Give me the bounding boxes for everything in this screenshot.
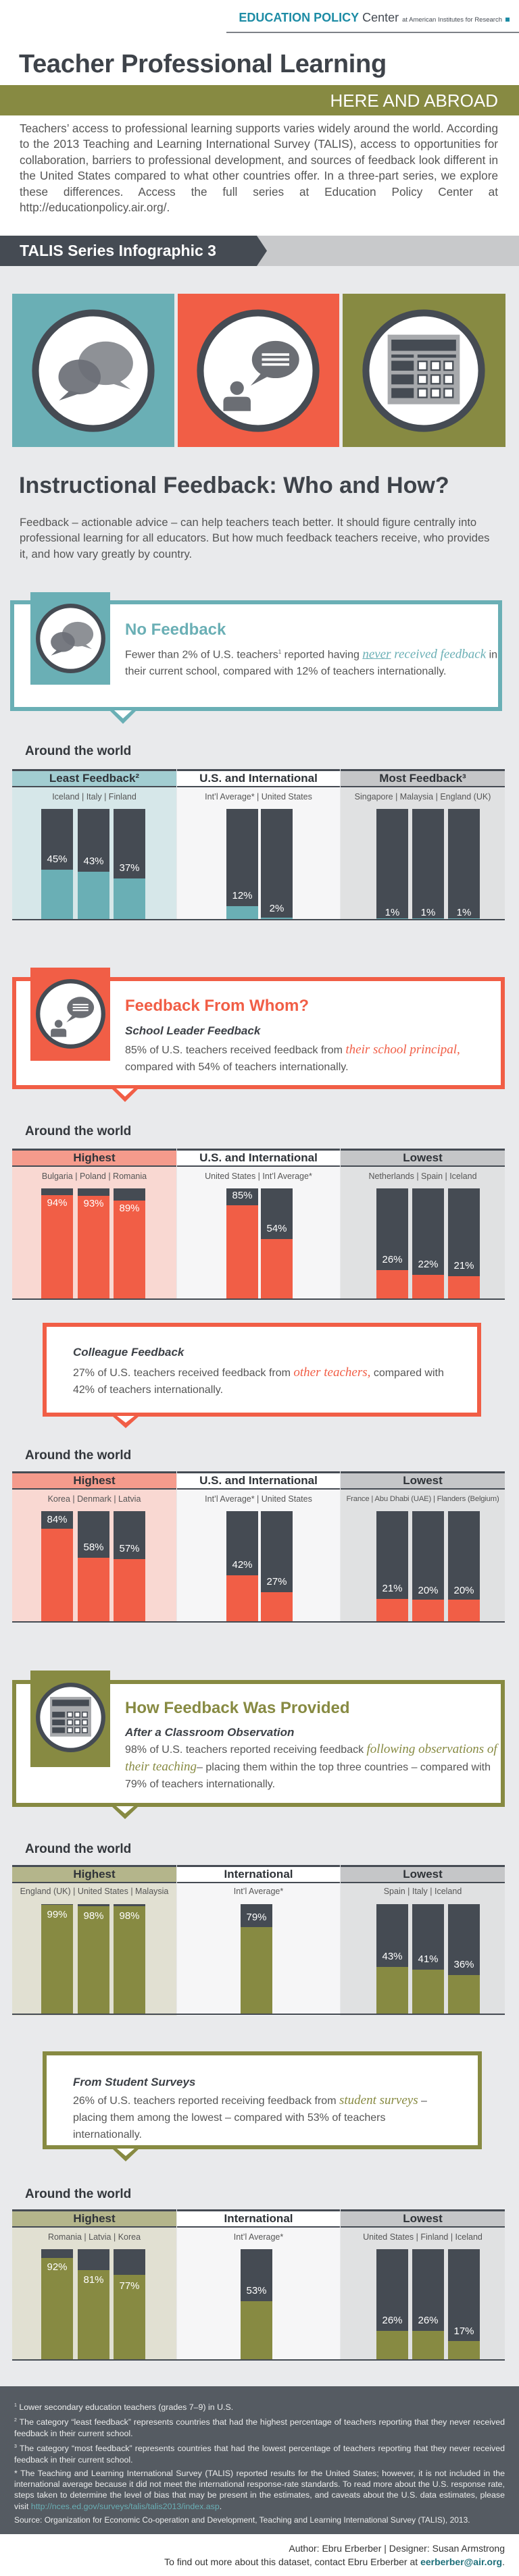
intro paragraph: Teachers’ access to professional learning supports varies widely around the world. According to the 2013 Teaching and Learning International Survey (TALIS), access to opportunities for collaboration, barriers to professional development, and sources of feedback look different in the United States compared to what other countries offer. In a three-part series, we explore these differences. Access the full series at Education Policy Center at http://educationpolicy.air.org/. [20,122,498,214]
icon: person speaking small [30,968,110,1061]
chart: no feedback: Most Feedback³ [379,772,466,785]
callout tip [112,1806,138,1819]
chart: school leader [12,1149,505,1300]
chart: classroom observation: 99% [47,1909,68,1920]
chart: no feedback: U.S. and International [199,772,318,785]
heading: around the world 4: Around the world [25,1842,131,1856]
chart: student surveys: 26% [418,2315,439,2326]
chart: school leader: Highest [73,1151,116,1164]
chart: no feedback: Least Feedback² [49,772,139,785]
chart: colleague: 84% [47,1514,68,1525]
chart: student surveys: 92% [47,2261,68,2273]
chart: no feedback: Int’l Average* | United States [205,792,312,801]
footnotes panel: 3 The category “most feedback” represents countries that had the lowest percentage of teachers reporting that they never received feedback in their current school. [14,2444,505,2465]
chart: school leader: 26% [382,1254,403,1265]
chart: student surveys: International [224,2212,293,2225]
credits: To find out more about this dataset, contact Ebru Erberber at eerberber@air.org. [164,2556,505,2567]
chart: colleague: Lowest [403,1474,443,1487]
callout: colleague feedback [43,1323,481,1417]
chart: classroom observation: Int’l Average* [234,1887,283,1896]
chart: classroom observation: 79% [246,1912,267,1923]
chart: school leader: 54% [266,1223,287,1234]
chart: classroom observation: 36% [453,1959,474,1970]
chart: colleague: Int’l Average* | United States [205,1494,312,1504]
heading: around the world 1: Around the world [25,744,131,758]
chart: colleague: Highest [73,1474,116,1487]
chart: colleague: France | Abu Dhabi (UAE) | Flanders (Belgium) [346,1495,499,1503]
chart: colleague: 21% [382,1583,403,1594]
heading: No Feedback [125,621,226,639]
chart: no feedback: 43% [83,856,104,867]
header logo [226,11,519,33]
section title: Instructional Feedback: Who and How? [19,473,449,498]
chart: colleague [12,1471,505,1623]
chart: no feedback: Iceland | Italy | Finland [52,792,137,801]
chart: classroom observation: England (UK) | United States | Malaysia [20,1887,168,1896]
subtitle band: HERE AND ABROAD [330,90,498,111]
callout: how feedback was provided [12,1680,505,1807]
chart: colleague: 20% [418,1585,439,1596]
chart: student surveys: 17% [453,2325,474,2337]
chart: colleague: 58% [83,1542,104,1553]
chart: classroom observation [12,1865,505,2016]
chart: student surveys [12,2209,505,2361]
chart: no feedback: Singapore | Malaysia | England (UK) [355,792,491,801]
callout tip [113,1416,139,1428]
chart: school leader: 21% [453,1260,474,1271]
chart: colleague: Korea | Denmark | Latvia [48,1494,141,1504]
chart: colleague: 20% [453,1585,474,1596]
chart: no feedback: 1% [421,907,435,918]
chart: classroom observation: International [224,1868,293,1881]
chart: no feedback [12,769,505,920]
chart: school leader: 85% [232,1190,253,1201]
chart: colleague: 27% [266,1576,287,1587]
footnotes panel: 1 Lower secondary education teachers (grades 7–9) in U.S. [14,2402,233,2412]
icon tile: person with speech [178,294,339,447]
chart: classroom observation: 98% [119,1910,140,1922]
series banner: TALIS Series Infographic 3 [20,242,216,259]
icon: speech bubbles small [30,592,110,685]
callout: student surveys [43,2051,482,2149]
icon: form small [30,1671,110,1767]
chart: no feedback: 1% [385,907,399,918]
heading: around the world 2: Around the world [25,1124,131,1138]
heading: How Feedback Was Provided [125,1699,350,1717]
chart: school leader: Netherlands | Spain | Iceland [368,1172,477,1181]
subheading: After a Classroom Observation [125,1726,294,1739]
chart: no feedback: 12% [232,890,253,901]
header logo: EDUCATION POLICY Center at American Institutes for Research [239,11,502,24]
chart: classroom observation: 43% [382,1951,403,1962]
callout tip [110,710,136,724]
chart: classroom observation: Spain | Italy | Iceland [384,1887,462,1896]
chart: school leader: United States | Int’l Average* [205,1172,312,1181]
subheading: School Leader Feedback [125,1024,260,1037]
chart: student surveys: United States | Finland | Iceland [363,2232,483,2242]
chart: student surveys: 81% [83,2274,104,2286]
chart: no feedback: 2% [270,903,284,914]
title: Teacher Professional Learning [19,50,387,78]
chart: student surveys: 77% [119,2280,140,2292]
heading: around the world 5: Around the world [25,2187,131,2201]
chart: no feedback: 37% [119,862,140,874]
text: 85% of U.S. teachers received feedback from their school principal, compared with 54% of teachers internationally. [125,1043,460,1073]
chart: colleague: U.S. and International [199,1474,318,1487]
subheading: From Student Surveys [73,2076,195,2088]
chart: school leader: Bulgaria | Poland | Romania [42,1172,147,1181]
subtitle band [0,85,519,115]
chart: school leader: 94% [47,1197,68,1209]
chart: school leader: 89% [119,1203,140,1214]
chart: student surveys: Int’l Average* [234,2232,283,2242]
chart: student surveys: 26% [382,2315,403,2326]
chart: school leader: 93% [83,1198,104,1209]
chart: classroom observation: Highest [73,1868,116,1881]
chart: colleague: 42% [232,1559,253,1571]
chart: student surveys: Romania | Latvia | Korea [48,2232,141,2242]
series banner [0,236,519,266]
callout: no feedback [10,600,502,711]
chart: colleague: 57% [119,1543,140,1554]
subheading: Colleague Feedback [73,1346,184,1359]
text: 98% of U.S. teachers reported receiving feedback following observations of their teaching– placing them within the top three countries – compared with 79% of teachers internationally. [125,1742,497,1790]
chart: classroom observation: 41% [418,1953,439,1965]
chart: student surveys: Highest [73,2212,116,2225]
heading: Feedback From Whom? [125,997,309,1015]
footnotes panel [0,2386,519,2534]
callout tip [113,2149,139,2161]
callout: feedback from whom [12,977,505,1089]
icon tile: speech bubbles [12,294,174,447]
text: 26% of U.S. teachers reported receiving feedback from student surveys – placing them among the lowest – compared with 53% of teachers internationally. [73,2093,427,2140]
footnotes panel: * The Teaching and Learning International Survey (TALIS) reported results for the United States; however, it is not included in the international average because it did not meet the international response-rate standards. To read more about the U.S. response rate, steps taken to determine the level of bias that may be present in the estimates, and caveats about the U.S. data estimates, please visit http://nces.ed.gov/surveys/talis/talis2013/index.asp. [14,2469,505,2511]
heading: around the world 3: Around the world [25,1448,131,1463]
chart: school leader: Lowest [403,1151,443,1164]
section intro: Feedback – actionable advice – can help teachers teach better. It should figure centrally into professional learning for all educators. But how much feedback teachers receive, who provides it, and how vary greatly by country. [20,516,489,560]
chart: classroom observation: 98% [83,1910,104,1922]
chart: student surveys: Lowest [403,2212,443,2225]
footnotes panel: 2 The category “least feedback” represents countries that had the highest percentage of teachers reporting that they never received feedback in their current school. [14,2418,505,2438]
text: 27% of U.S. teachers received feedback from other teachers, compared with 42% of teachers internationally. [73,1365,444,1396]
credits: Author: Ebru Erberber | Designer: Susan Armstrong [289,2543,505,2554]
chart: school leader: U.S. and International [199,1151,318,1164]
callout tip [112,1088,138,1102]
credits [164,2543,505,2567]
chart: no feedback: 1% [457,907,471,918]
chart: student surveys: 53% [246,2285,267,2296]
chart: classroom observation: Lowest [403,1868,443,1881]
footnotes panel: Source: Organization for Economic Co-operation and Development, Teaching and Learning International Survey (TALIS), 2013. [14,2515,470,2525]
chart: school leader: 22% [418,1259,439,1270]
icon tile: evaluation form [343,294,505,447]
chart: no feedback: 45% [47,853,68,865]
text: Fewer than 2% of U.S. teachers1 reported having never received feedback in their current school, compared with 12% of teachers internationally. [125,647,497,677]
